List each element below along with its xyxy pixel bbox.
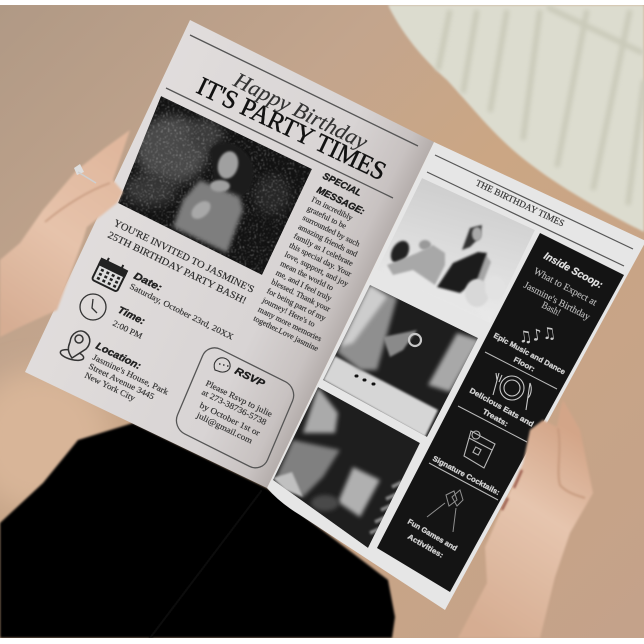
text: location: New York City (83, 370, 138, 403)
intro text (522, 266, 599, 323)
body copy: message: mean the world to (279, 259, 335, 292)
label: food: Treats: (481, 407, 510, 428)
body copy: message: surrounded by such (301, 213, 361, 249)
body copy: message: journey! Here's to (260, 295, 316, 329)
icon: cocktail glass (464, 431, 495, 468)
body copy: RSVP (194, 378, 274, 446)
rule: header (427, 172, 624, 266)
label: cocktails: Signature Cocktails: (431, 454, 502, 497)
photo: woman with balloons (386, 178, 535, 306)
body copy: RSVP: at 273-38736-5738 (200, 387, 268, 427)
heading: special message (315, 171, 366, 217)
heading: inside scoop: Inside Scoop: (542, 250, 605, 291)
label: food: Delicious Eats and (468, 386, 536, 429)
heading: special message: MESSAGE: (315, 185, 366, 217)
heading: Happy Birthday: Happy Birthday (229, 67, 372, 154)
text: time: 2:00 PM (111, 318, 145, 341)
text: time: Time: (116, 305, 147, 327)
body copy: message: me, and I feel truly (274, 268, 333, 303)
text block: special message (251, 171, 378, 353)
text: location: Jasmine's House, Park (91, 352, 171, 397)
rule: top (435, 155, 633, 249)
panel: inside scoop (377, 233, 624, 592)
body copy: message: blessed. Thank your (270, 277, 332, 314)
icon: map pin (59, 331, 90, 362)
left hand holding page (0, 130, 130, 337)
label: music: Floor: (512, 355, 537, 374)
icon: music notes: ♫♪♫ (517, 323, 557, 347)
body copy: message: many more memories (256, 305, 323, 343)
body copy: message: this special day. Your (288, 241, 353, 279)
panel: RSVP (172, 343, 298, 473)
text: location (83, 341, 171, 403)
photo: hand and cocktail glass (323, 285, 480, 437)
brochure: left page (25, 20, 434, 488)
body copy: RSVP: Please Rsvp to julie (204, 378, 274, 419)
body copy: message: I'm incredibly (310, 195, 354, 222)
body copy: message: for being part of my (265, 286, 327, 323)
text: location: Location: (94, 341, 143, 372)
body copy: message: grateful to be (306, 204, 348, 231)
background: dark trousers (0, 423, 395, 638)
text: date: Saturday, October 23rd, 20XX (128, 281, 235, 342)
heading: It's Party Times: IT'S PARTY TIMES (192, 71, 391, 186)
text: location: Street Avenue 3445 (87, 361, 156, 401)
body copy: message: amazing friends and (297, 222, 359, 259)
icon: speech bubble (214, 358, 230, 372)
intro text: Jasmine's Birthday (522, 280, 592, 323)
body copy: message: together.Love jasmine (252, 314, 320, 353)
body copy: message: love, support, and joy (283, 250, 350, 288)
invitation text: 25TH BIRTHDAY PARTY BASH! (106, 230, 248, 307)
right hand holding page (458, 400, 593, 638)
heading: RSVP: RSVP (233, 366, 267, 390)
label: games: Activities: (406, 532, 445, 560)
intro text: Bash! (540, 300, 562, 319)
icon: calendar (92, 255, 129, 292)
icon: clinking glasses (427, 490, 463, 532)
icon: clock (80, 294, 106, 320)
body copy: message: family as I celebrate (292, 231, 355, 268)
header: The Birthday Times: THE BIRTHDAY TIMES (474, 179, 566, 229)
photo: friends with drinks (273, 387, 420, 548)
photo: woman with glass (118, 96, 312, 275)
rule: top (190, 35, 418, 146)
heading: special message: SPECIAL (321, 171, 363, 199)
invitation text: YOU'RE INVITED TO JASMINE'S (112, 218, 256, 296)
label: music: Epic Music and Dance (492, 331, 567, 376)
text: date: Date: (132, 271, 163, 294)
label: games: Fun Games and (406, 517, 459, 553)
brochure: right page (267, 142, 644, 610)
text: time (111, 305, 147, 341)
icon: plate with cutlery (493, 373, 531, 410)
body copy: RSVP: by October 1st or (198, 400, 262, 438)
icon: ring (74, 164, 96, 183)
background: white blinds (388, 5, 644, 232)
rule: under title (166, 88, 393, 198)
body copy: RSVP: juli@gmail.com (194, 409, 255, 446)
intro text: What to Expect at (532, 266, 599, 309)
